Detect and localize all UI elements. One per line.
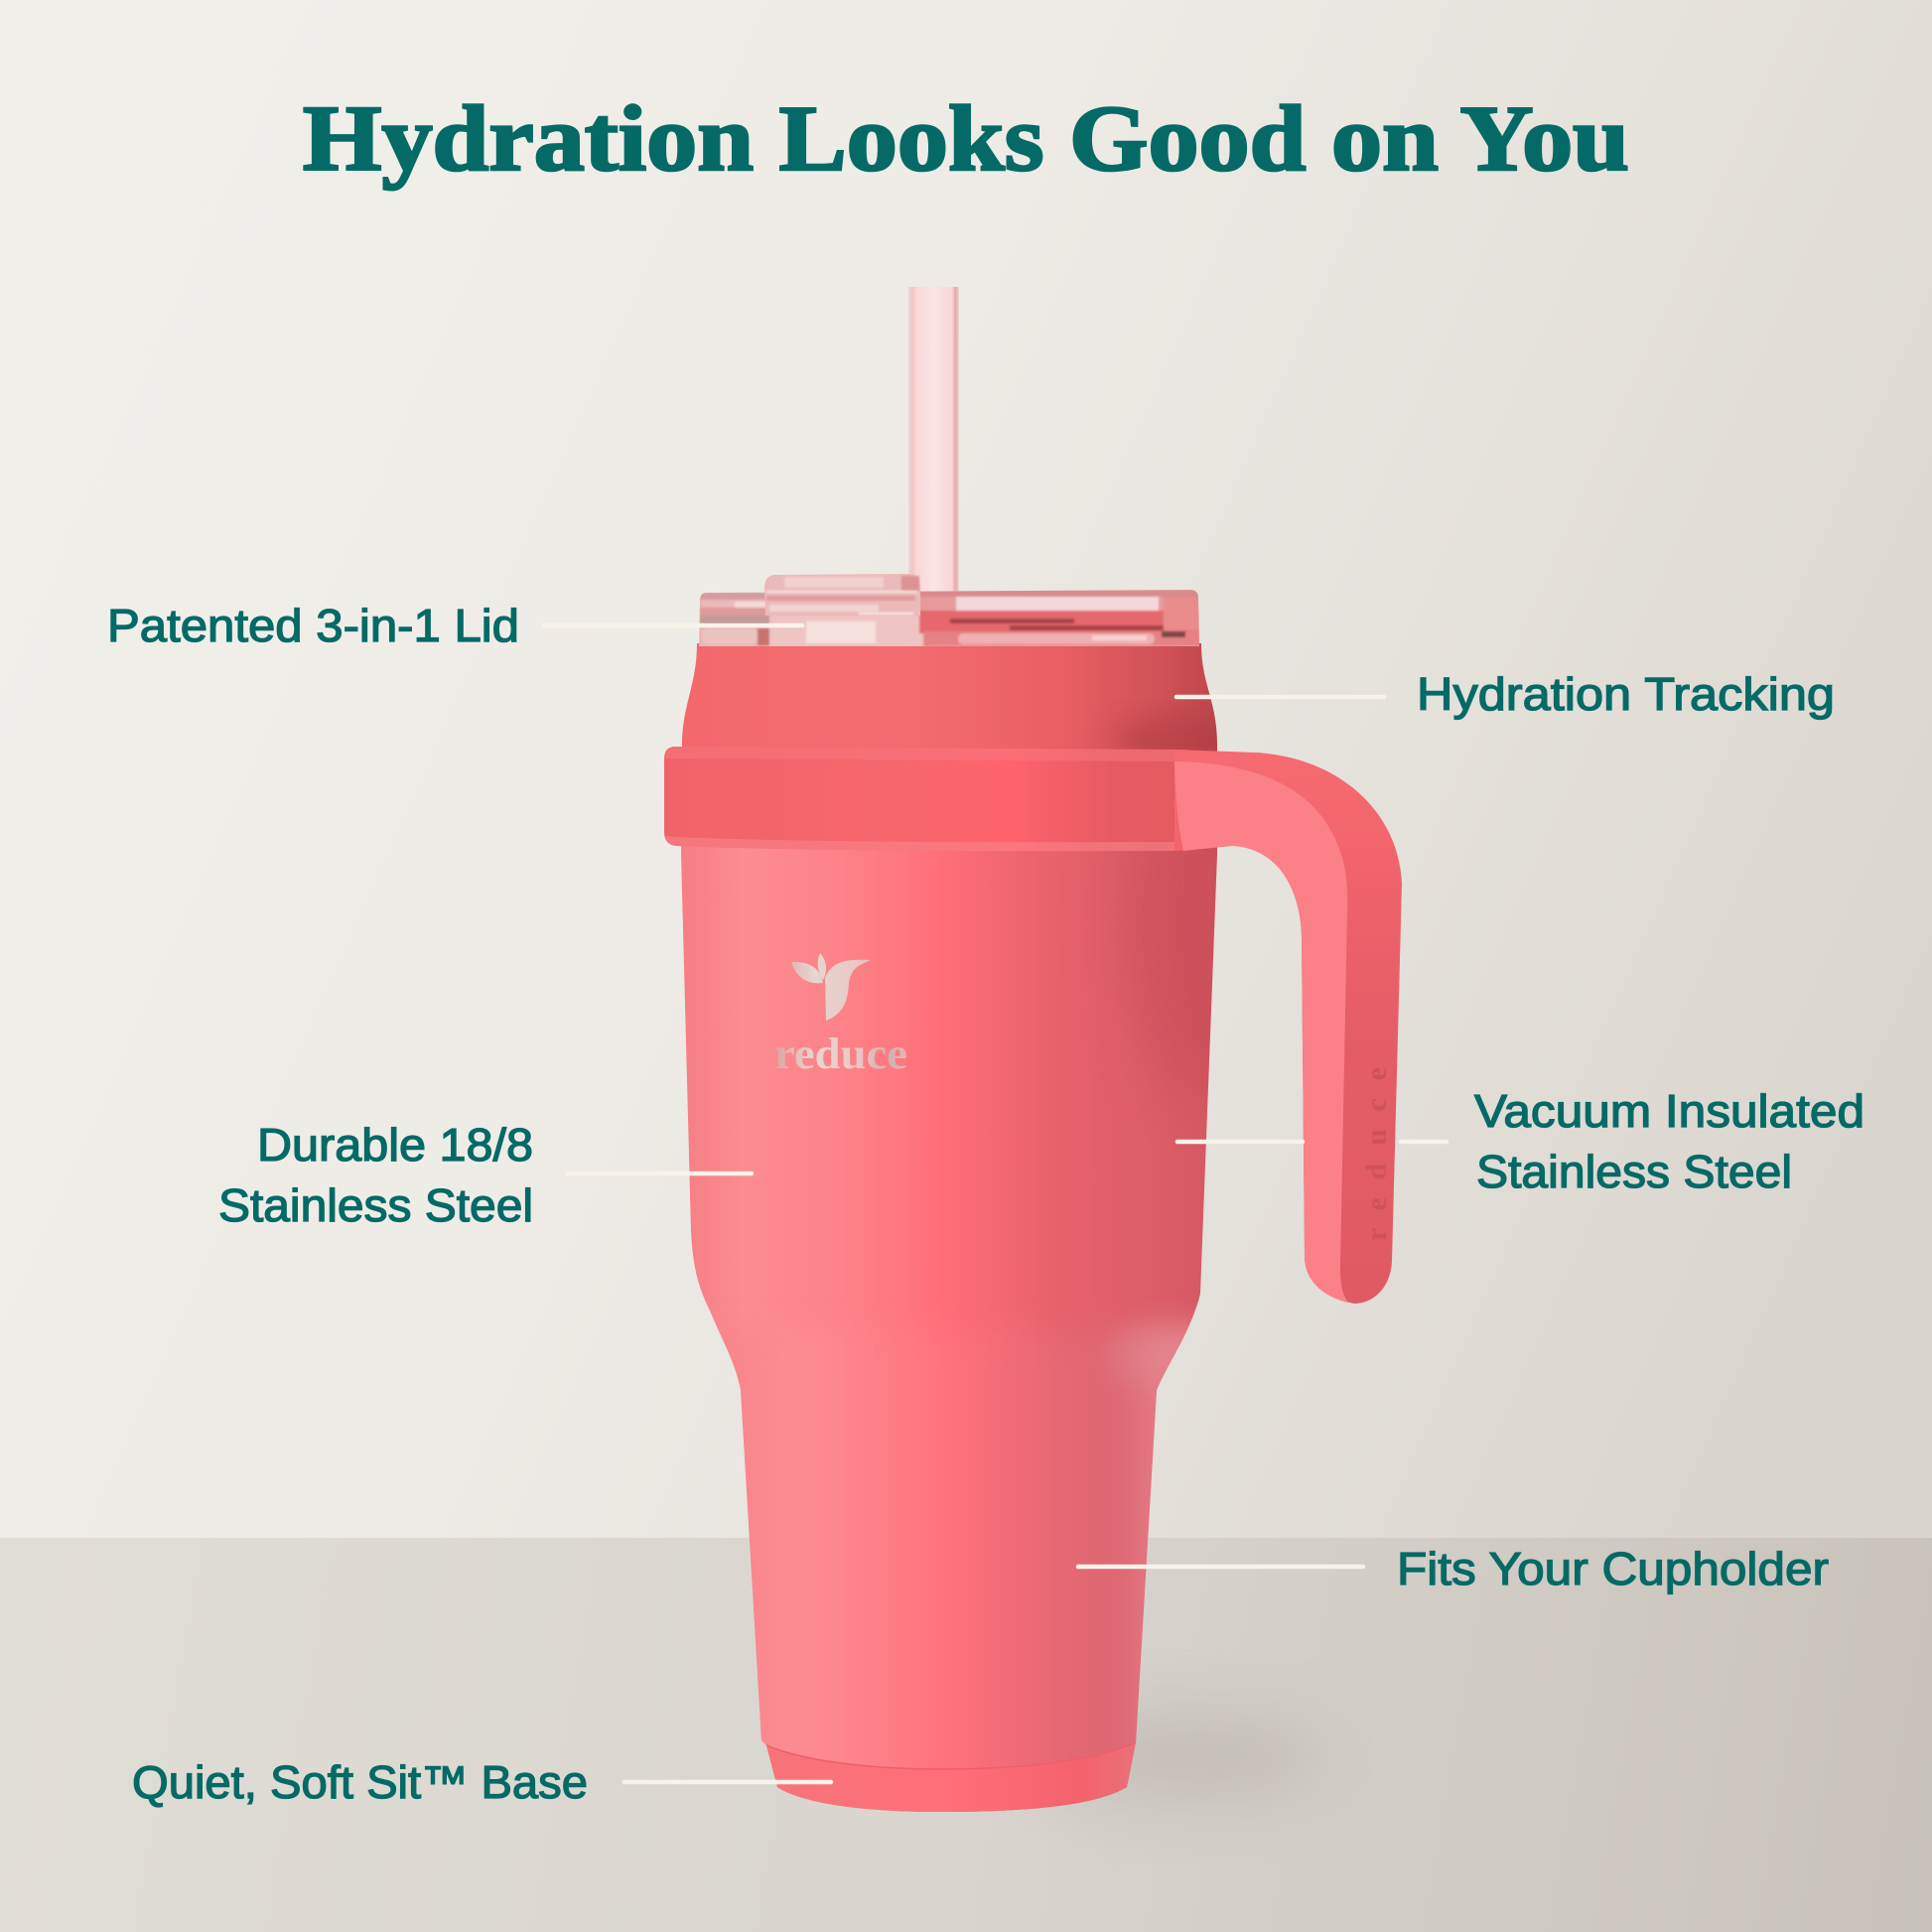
glass straw <box>908 287 959 595</box>
floor surface <box>0 1538 1932 1932</box>
flip-up sip tab <box>764 574 920 616</box>
soft-sit base <box>766 1742 1136 1812</box>
callout: durable stainless steel <box>218 1119 752 1231</box>
callout: vacuum insulated <box>1177 1085 1864 1197</box>
embossed handle wordmark: reduce <box>1360 1067 1393 1241</box>
callout: soft sit base: Quiet, Soft Sit™ Base <box>132 1756 588 1808</box>
tumbler product illustration <box>664 287 1402 1812</box>
handle band <box>664 747 1186 851</box>
callout: hydration tracking: Hydration Tracking <box>1417 668 1835 720</box>
callout: durable stainless steel: Durable 18/8 <box>257 1119 533 1171</box>
logo wordmark: reduce <box>774 1030 907 1078</box>
callout: fits your cupholder: Fits Your Cupholder <box>1397 1543 1829 1594</box>
callout: durable stainless steel: Stainless Steel <box>218 1179 533 1231</box>
tumbler shadow on floor <box>1033 1716 1330 1799</box>
logo leaf mark <box>791 953 871 1021</box>
callout: vacuum insulated: Vacuum Insulated <box>1474 1085 1864 1137</box>
title: Hydration Looks Good on You <box>303 87 1629 191</box>
handle <box>1174 750 1402 1304</box>
tumbler body <box>681 846 1217 1812</box>
callout: vacuum insulated: Stainless Steel <box>1476 1146 1792 1197</box>
background wall <box>0 0 1932 1541</box>
callout: patented lid: Patented 3-in-1 Lid <box>107 600 519 651</box>
reduce logo <box>774 953 907 1078</box>
clear lid <box>695 588 1203 649</box>
upper neck of tumbler <box>682 643 1217 752</box>
